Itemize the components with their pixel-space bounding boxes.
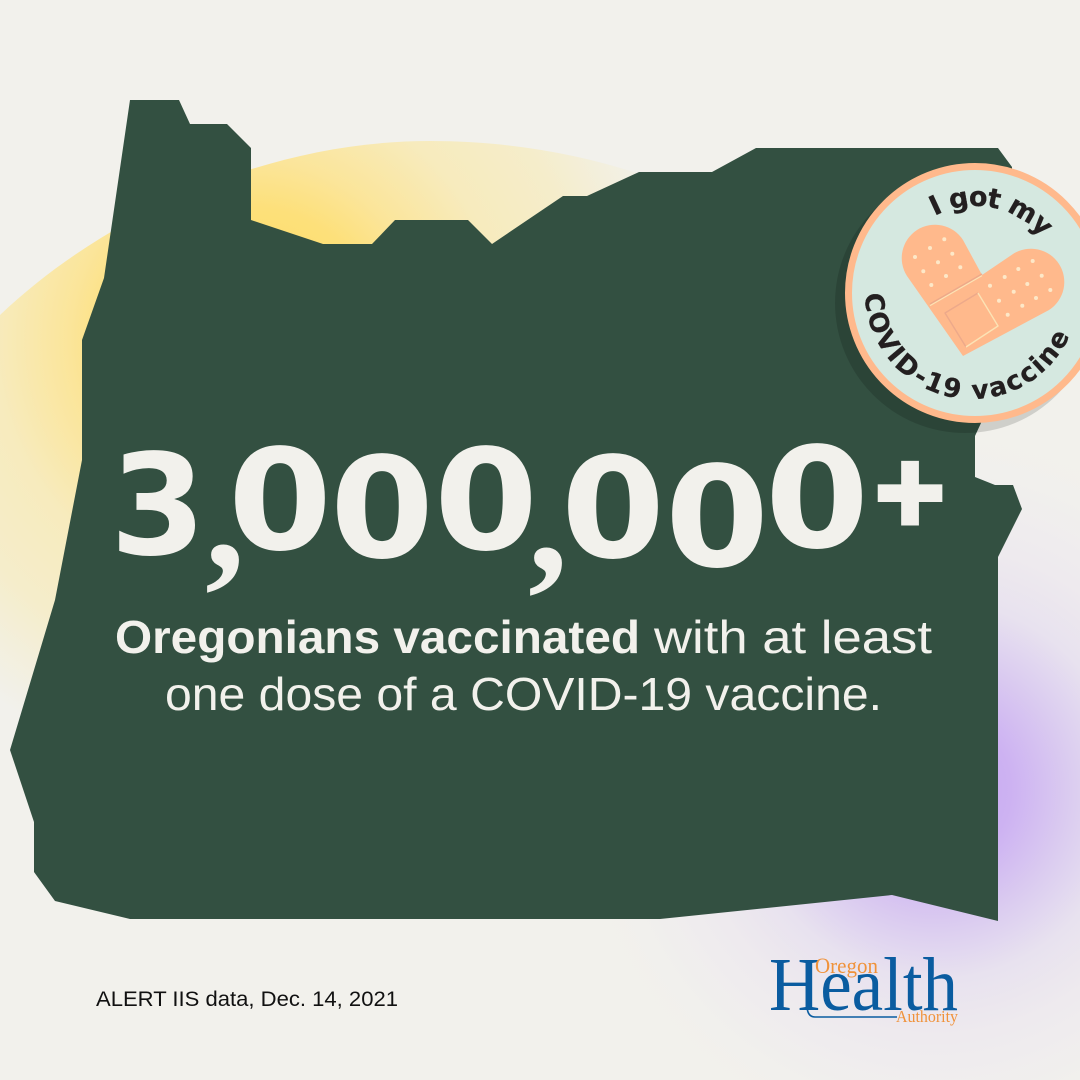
sticker: I got my COVID-19 vaccine (835, 163, 1080, 433)
headline number: 0 (561, 428, 665, 591)
headline number: 3 (110, 425, 206, 588)
Oregon state silhouette (10, 100, 1022, 921)
logo: Oregon Health Authority: Authority (896, 1007, 958, 1026)
icon: heart-shaped bandage (902, 225, 1064, 356)
sticker shadow (835, 173, 1080, 433)
headline number: 0 (228, 420, 332, 583)
logo: Oregon Health Authority: Oregon (815, 953, 878, 978)
logo: Oregon Health Authority: Health (769, 943, 958, 1027)
headline number: + (871, 437, 949, 544)
sticker text top: I got my (928, 188, 1052, 235)
headline number: , (205, 425, 245, 603)
purple gradient glow (555, 410, 1080, 1080)
subtitle text: Oregonians vaccinated (115, 611, 640, 663)
sticker text bottom: COVID-19 vaccine (865, 294, 1068, 399)
headline number: 0 (765, 418, 869, 581)
headline number (110, 418, 949, 606)
subtitle text: with at least (653, 611, 932, 663)
headline number: 0 (665, 437, 769, 600)
subtitle text: one dose of a COVID-19 vaccine. (165, 668, 882, 720)
headline number: , (528, 428, 568, 606)
subtitle text (115, 611, 932, 720)
yellow gradient blob (0, 141, 936, 879)
sticker badge (848, 166, 1080, 420)
source note: ALERT IIS data, Dec. 14, 2021 (96, 988, 398, 1011)
headline number: 0 (330, 428, 434, 591)
headline number: 0 (434, 420, 538, 583)
